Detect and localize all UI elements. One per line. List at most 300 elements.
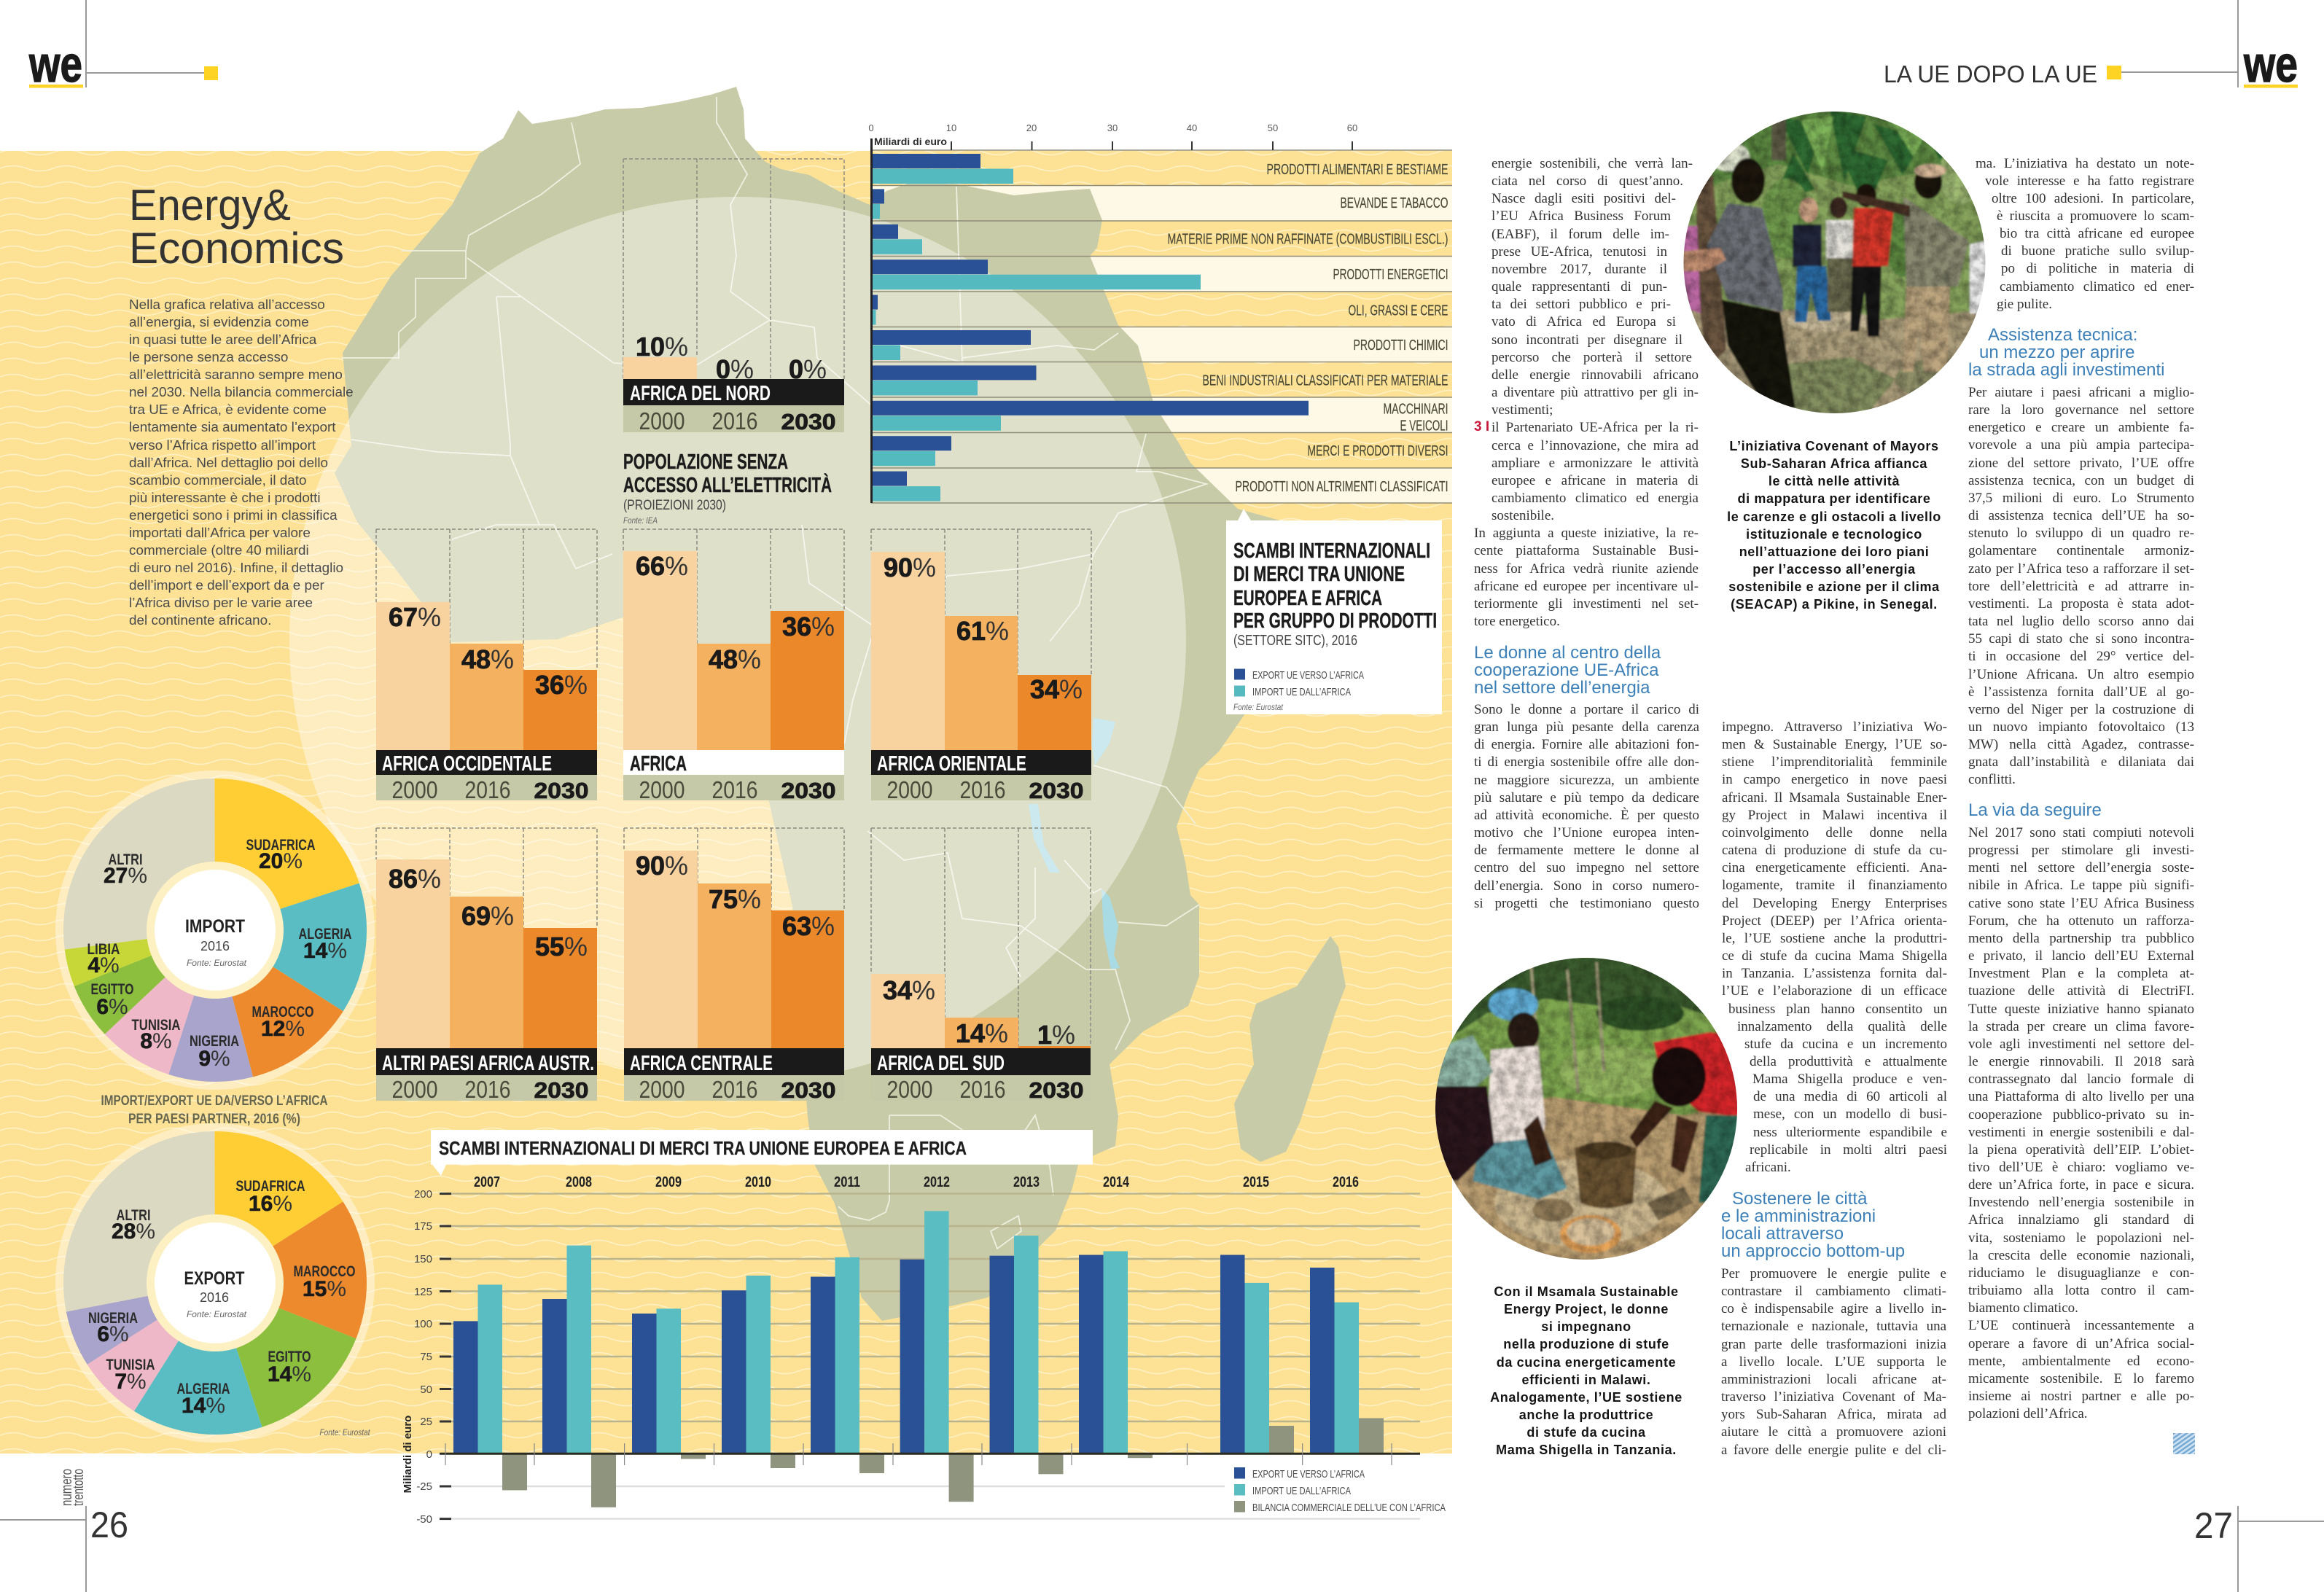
pie chart: export 2016: EXPORT: [184, 1268, 245, 1289]
article column 2: text around photo: catena di produzione di stufe da cu-: [1722, 843, 1947, 858]
header right: section title and logo: [1884, 0, 2298, 93]
bar panel: Altri paesi Africa australe: 2016: [465, 1076, 510, 1103]
horizontal bar chart: trade by product group: PRODOTTI ALIMENTARI E BESTIAME: [1267, 162, 1448, 178]
article column 1: top text: il Partenariato UE-Africa per la ri-: [1492, 420, 1699, 435]
heading: Assistenza tecnica: un mezzo per aprire: [1979, 343, 2134, 362]
pie chart: export 2016: 14%: [182, 1394, 225, 1418]
article column 2: text around photo: mese, con un modello di busi-: [1753, 1107, 1947, 1122]
electricity access circle overlay: [289, 197, 1186, 1083]
bar panel: Africa orientale: 61%: [956, 616, 1009, 646]
horizontal bar chart: trade by product group: BENI INDUSTRIALI CLASSIFICATI PER MATERIALE: [1203, 373, 1448, 389]
article column 2: bottom text: gran parte delle trasformazioni inizia: [1721, 1337, 1946, 1352]
yellow wave background band: [0, 151, 1452, 1454]
bar panel: Africa del Nord: 2030: [781, 409, 835, 434]
article column 2: text around photo: in Tanzania. L’assistenza fornita dal-: [1722, 966, 1947, 981]
pie chart: import 2016: 6%: [96, 995, 128, 1019]
article column 3: Assistenza tecnica text: zione del settore privato, l’UE offre: [1968, 456, 2194, 471]
article column 1: top text: teriormente gli investimenti nel set-: [1474, 596, 1699, 612]
pie chart: export 2016: MAROCCO: [293, 1263, 356, 1280]
article column 2: bottom text: contrastare il cambiamento climati-: [1721, 1284, 1946, 1299]
column chart: EU-Africa trade 2007-2016: 2014: [1103, 1174, 1130, 1190]
article column 3: Assistenza tecnica text: [1968, 385, 2194, 787]
bar panel: Africa centrale: 2000: [639, 1076, 685, 1103]
bar panel: Africa occidentale: 2000: [392, 776, 437, 803]
bar panel: Altri paesi Africa australe: 2030: [534, 1077, 589, 1103]
article column 3: top text: gie pulite.: [1997, 297, 2052, 312]
column chart: EU-Africa trade 2007-2016: 2015: [1243, 1174, 1269, 1190]
article column 3: La via da seguire text: riduciamo le disuguaglianze e con-: [1968, 1265, 2194, 1281]
heading: La via da seguire: La via da seguire: [1968, 800, 2102, 820]
horizontal bar chart: trade by product group: PRODOTTI NON ALTRIMENTI CLASSIFICATI: [1235, 479, 1448, 495]
pie chart: export 2016: 28%: [112, 1220, 155, 1244]
header right: section title and logo: we: [2243, 36, 2298, 93]
horizontal bar chart: trade by product group: OLI, GRASSI E CERE: [1349, 303, 1448, 319]
article column 2: bottom text: Per promuovere le energie pulite e: [1721, 1266, 1946, 1281]
pie chart: import 2016: EGITTO: [90, 981, 134, 998]
column chart: EU-Africa trade 2007-2016: 175: [414, 1220, 432, 1233]
bar panel: Africa: 36%: [782, 612, 835, 641]
footer left: page number and issue: 26: [90, 1505, 128, 1545]
intro text block: l’Africa diviso per le varie aree: [129, 596, 313, 611]
title: [129, 181, 344, 273]
column chart: EU-Africa trade 2007-2016: [402, 1174, 1446, 1526]
horizontal bar chart: trade by product group: 50: [1268, 122, 1278, 133]
pie chart: export 2016: NIGERIA: [88, 1310, 138, 1327]
pie chart: import 2016: 14%: [303, 939, 347, 963]
photo caption: Pikine: di mappatura per identificare: [1737, 491, 1931, 506]
pie chart: export 2016: 7%: [114, 1370, 147, 1394]
article column 3: La via da seguire text: biamento climatico.: [1968, 1300, 2078, 1316]
cream chart row stripes: [871, 185, 1452, 503]
heading: Sostenere le città: [1721, 1189, 1905, 1261]
article column 2: bottom text: yors Sub-Saharan Africa, mirata ad: [1721, 1407, 1946, 1422]
bar panel: Africa del Nord: 2000: [639, 407, 685, 434]
article column 1: top text: delle energie rinnovabili africano: [1492, 367, 1699, 383]
bar panel: Africa: 66%: [636, 551, 688, 581]
column chart: EU-Africa trade 2007-2016: 2007: [474, 1174, 500, 1190]
bar panel: Africa orientale: 2030: [1029, 778, 1083, 803]
pie chart: import 2016: LIBIA: [87, 941, 120, 958]
article column 1: top text: sostenibile.: [1492, 508, 1554, 523]
bar panel: Altri paesi Africa australe: ALTRI PAESI AFRICA AUSTR.: [382, 1052, 594, 1075]
article column 1: top text: novembre 2017, durante il: [1492, 262, 1667, 277]
heading: Le donne: Le donne al centro della: [1474, 643, 1661, 663]
pie chart: export 2016: 6%: [97, 1322, 129, 1346]
article column 3: Assistenza tecnica text: energetico e creare un ambiente fa-: [1968, 420, 2194, 435]
article column 2: text around photo: innalzamento della qualità delle: [1737, 1019, 1947, 1034]
article column 2: text around photo: coinvolgimento delle donne nella: [1722, 825, 1947, 840]
article column 3: Assistenza tecnica text: ti in occasione del 29° vertice del-: [1968, 649, 2194, 664]
horizontal bar chart: trade by product group: BEVANDE E TABACCO: [1340, 195, 1448, 211]
header right: section title and logo: LA UE DOPO LA UE: [1884, 61, 2097, 87]
pie chart: import 2016: Fonte: Eurostat: [187, 958, 247, 968]
intro text block: più interessante è che i prodotti: [129, 491, 321, 506]
bar panel: Africa del Nord: 2016: [711, 407, 758, 434]
chart heading: population without electricity: ACCESSO ALL’ELETTRICITÀ: [623, 472, 832, 497]
hatched end mark: [2173, 1433, 2195, 1454]
article column 2: text around photo: africani. Il Msamala Sustainable Ener-: [1722, 790, 1947, 805]
column chart: EU-Africa trade 2007-2016: EXPORT UE VERSO L’AFRICA: [1252, 1468, 1365, 1480]
bar panel: Africa orientale: AFRICA ORIENTALE: [877, 752, 1026, 776]
photo caption: Pikine: (SEACAP) a Pikine, in Senegal.: [1731, 597, 1938, 612]
callout box: product group chart title and legend: (SETTORE SITC), 2016: [1233, 633, 1357, 649]
heading: Le donne: [1474, 643, 1661, 698]
photo caption: Malawi: anche la produttrice: [1519, 1408, 1653, 1422]
column chart: EU-Africa trade 2007-2016: -50: [416, 1513, 432, 1526]
article column 3: La via da seguire text: vita, sosteniamo le popolazioni nel-: [1968, 1230, 2194, 1246]
article column 1: top text: cambiamento climatico ed energia: [1492, 491, 1699, 506]
pie chart: import 2016: NIGERIA: [190, 1033, 239, 1050]
intro text block: [129, 297, 354, 628]
column chart: EU-Africa trade 2007-2016: 2008: [566, 1174, 592, 1190]
bar panel: Africa occidentale: [376, 529, 597, 803]
article column 3: La via da seguire text: insieme ai nostri partner e alle po-: [1968, 1389, 2194, 1404]
intro text block: dell’import e dell’export da e per: [129, 578, 324, 593]
article column 2: text around photo: in campo energetico in nove paesi: [1722, 772, 1947, 787]
article column 3: Assistenza tecnica text: MW) nella città Agadez, contrasse-: [1968, 737, 2194, 752]
red list number: 3 I: [1474, 419, 1489, 434]
intro text block: del continente africano.: [129, 613, 271, 628]
article column 3: La via da seguire text: Africa innalziamo gli standard di: [1968, 1212, 2194, 1228]
bar panel: Africa del Nord: AFRICA DEL NORD: [630, 382, 771, 405]
photo caption: Malawi: da cucina energeticamente: [1497, 1355, 1676, 1370]
pie chart: export 2016: 15%: [303, 1277, 346, 1301]
article column 2: bottom text: a favore delle energie pulite e del cli-: [1721, 1443, 1946, 1458]
intro text block: tra UE e Africa, è evidente come: [129, 402, 327, 418]
article column 1: top text: tore energetico.: [1474, 614, 1560, 629]
heading: Le donne: cooperazione UE-Africa: [1474, 660, 1658, 680]
pie chart: export 2016: ALTRI: [117, 1207, 150, 1224]
article column 2: text around photo: stiene l’imprenditorialità femminile: [1722, 754, 1947, 770]
bar panel: Africa del Nord: 10%: [636, 332, 688, 362]
bar panel: Africa del Sud: 2000: [886, 1076, 933, 1103]
bar panel: Africa centrale: 90%: [636, 851, 688, 881]
photo caption: Malawi: Analogamente, l’UE sostiene: [1490, 1390, 1682, 1405]
article column 2: text around photo: logamente, tramite il finanziamento: [1722, 878, 1947, 893]
article column 1: top text: prese UE-Africa, tenutosi in: [1492, 244, 1667, 260]
footer right: page number: 27: [2194, 1505, 2233, 1546]
article column 3: Assistenza tecnica text: stenuto lo sviluppo di un quadro re-: [1968, 526, 2194, 541]
article column 3: Assistenza tecnica text: gnata dall’instabilità e dilaniata dai: [1968, 754, 2194, 770]
photo caption: Malawi: di stufe da cucina: [1526, 1425, 1646, 1440]
pie chart: import 2016: 2016: [200, 939, 230, 953]
photo: Covenant of Mayors field visit in Pikine: [1677, 109, 1990, 423]
horizontal bar chart: trade by product group: MACCHINARI: [1384, 401, 1448, 417]
photo caption: Pikine: le carenze e gli ostacoli a livello: [1727, 510, 1941, 524]
bar panel: Africa: 2030: [781, 778, 835, 803]
heading: Sostenere le città: un approccio bottom-up: [1721, 1241, 1905, 1261]
pie charts heading: [101, 1093, 328, 1127]
intro text block: verso l’Africa rispetto all’import: [129, 437, 316, 453]
article column 3: La via da seguire text: nibile in Africa. Le tappe più signifi-: [1968, 878, 2194, 893]
photo caption: Malawi: Mama Shigella in Tanzania.: [1496, 1443, 1677, 1457]
article column 3: La via da seguire text: vestimenti in energie sostenibili e dal-: [1968, 1125, 2194, 1140]
article column 3: Assistenza tecnica text: zato per l’Africa teso a rafforzare il set-: [1968, 561, 2194, 577]
article column 2: text around photo: business plan hanno consentito un: [1728, 1002, 1947, 1016]
photo caption: Pikine: nell’attuazione dei loro piani: [1739, 545, 1929, 559]
article column 1: Le donne text: de fermamente mettere le donne al: [1474, 843, 1699, 858]
intro text block: le persone senza accesso: [129, 350, 288, 365]
horizontal bar chart: trade by product group: 40: [1187, 122, 1197, 133]
column chart: EU-Africa trade 2007-2016: 0: [426, 1448, 432, 1461]
column chart title bar: [431, 1130, 1093, 1176]
column chart title bar: SCAMBI INTERNAZIONALI DI MERCI TRA UNIONE EUROPEA E AFRICA: [439, 1137, 967, 1159]
article column 1: top text: ampliare e armonizzare le attività: [1492, 456, 1699, 471]
bar panel: Africa del Nord: 0%: [716, 354, 754, 384]
horizontal bar chart: trade by product group: 20: [1026, 122, 1037, 133]
article column 3: La via da seguire text: polazioni dell’Africa.: [1968, 1406, 2088, 1421]
bar panel: Africa centrale: 63%: [782, 911, 835, 941]
article column 3: La via da seguire text: dere un’Africa forte, in pace e sicura.: [1968, 1177, 2194, 1193]
photo caption: Malawi: [1490, 1284, 1682, 1457]
article column 2: text around photo: men & Sustainable Energy, l’UE so-: [1722, 737, 1947, 752]
article column 1: top text: sono incontrati per disegnare il: [1492, 332, 1682, 348]
article column 1: top text: percorso che porterà il settore: [1492, 350, 1692, 365]
article column 3: La via da seguire text: vole agli investimenti nel settore del-: [1968, 1037, 2194, 1052]
heading: Assistenza tecnica: la strada agli investimenti: [1968, 360, 2164, 380]
pie chart: import 2016: 8%: [140, 1029, 172, 1053]
article column 3: La via da seguire text: le energie rinnovabili. Il 2018 sarà: [1968, 1054, 2194, 1069]
article column 1: Le donne text: gran lunga più pesante della carenza: [1474, 719, 1699, 735]
callout box: product group chart title and legend: SCAMBI INTERNAZIONALI: [1233, 539, 1430, 563]
column chart: EU-Africa trade 2007-2016: 2009: [655, 1174, 682, 1190]
article column 3: Assistenza tecnica text: tore dell’elettricità e ad attrarre in-: [1968, 579, 2194, 594]
article column 1: top text: cerca e l’innovazione, che mira ad: [1492, 437, 1699, 453]
bar panel: Africa orientale: 2000: [886, 776, 933, 803]
article column 3: top text: oltre 100 adesioni. In particolare,: [1992, 191, 2194, 206]
article column 2: text around photo: del Developing Energy Enterprises: [1722, 896, 1947, 911]
article column 1: Le donne text: motivo che l’Unione europea inten-: [1474, 825, 1699, 840]
heading: Assistenza tecnica: Assistenza tecnica:: [1988, 325, 2137, 345]
pie chart: export 2016: 2016: [200, 1290, 229, 1305]
photo caption: Pikine: istituzionale e tecnologico: [1746, 527, 1922, 542]
column chart: EU-Africa trade 2007-2016: 2012: [924, 1174, 950, 1190]
photo caption: Pikine: [1727, 439, 1941, 612]
pie chart: import 2016: 27%: [104, 864, 147, 888]
pie chart: export 2016: ALGERIA: [176, 1381, 230, 1397]
pie chart: export 2016: 14%: [268, 1362, 311, 1386]
article column 1: Le donne text: ad attività economiche. È per questo: [1474, 808, 1699, 823]
bar panel: Africa del Sud: 2030: [1029, 1077, 1083, 1103]
intro text block: in quasi tutte le aree dell’Africa: [129, 332, 316, 348]
article column 3: La via da seguire text: la piena operatività dell’EIP. L’obiet-: [1968, 1142, 2194, 1158]
article column 2: text around photo: replicabile in molti altri paesi: [1750, 1142, 1947, 1158]
article column 3: La via da seguire text: Nel 2017 sono stati compiuti notevoli: [1968, 825, 2194, 840]
article column 2: bottom text: co è indispensabile agire a livello in-: [1721, 1301, 1946, 1316]
article column 3: Assistenza tecnica text: vestimenti. La proposta è stata adot-: [1968, 596, 2194, 612]
article column 3: La via da seguire text: [1968, 825, 2194, 1421]
article column 3: La via da seguire text: e privato, il lancio dell’EU External: [1968, 948, 2194, 964]
bar panel: Africa del Sud: [871, 828, 1091, 1103]
article column 3: top text: po di politiche in materia di: [2001, 261, 2194, 276]
map of Africa: [335, 87, 1349, 1321]
article column 3: Assistenza tecnica text: golamentare continentale armoniz-: [1968, 543, 2194, 558]
horizontal bar chart: trade by product group: PRODOTTI CHIMICI: [1353, 337, 1448, 354]
callout box: product group chart title and legend: [1226, 509, 1442, 714]
article column 3: La via da seguire text: mente, ambientalmente ed econo-: [1968, 1354, 2194, 1369]
footer left: page number and issue: numero: [59, 1469, 75, 1506]
bar panel: Africa centrale: 2016: [711, 1076, 758, 1103]
photo caption: Malawi: efficienti in Malawi.: [1521, 1373, 1651, 1387]
bar panel: Altri paesi Africa australe: 55%: [535, 932, 588, 961]
bar panel: Africa orientale: 90%: [884, 553, 936, 582]
article column 3: La via da seguire text: Forum, che ha ottenuto un rafforza-: [1968, 913, 2194, 929]
pie chart: export 2016: EGITTO: [268, 1349, 311, 1365]
bar panel: Africa: AFRICA: [630, 752, 687, 776]
article column 3: La via da seguire text: Tutte queste iniziative hanno spianato: [1968, 1002, 2194, 1017]
chart heading: population without electricity: (PROIEZIONI 2030): [623, 498, 726, 513]
callout box: product group chart title and legend: EXPORT UE VERSO L’AFRICA: [1252, 669, 1364, 682]
intro text block: nel 2030. Nella bilancia commerciale: [129, 385, 354, 400]
article column 3: Assistenza tecnica text: verno del Niger per la costruzione di: [1968, 702, 2194, 717]
pie chart: export 2016: 16%: [249, 1192, 292, 1216]
pie charts heading: IMPORT/EXPORT UE DA/VERSO L’AFRICA: [101, 1093, 328, 1109]
article column 1: Le donne text: di energia. Fornire alle abitazioni fon-: [1474, 737, 1699, 752]
article column 3: La via da seguire text: Investendo nell’energia sostenibile in: [1968, 1195, 2194, 1210]
column chart: EU-Africa trade 2007-2016: 200: [414, 1188, 432, 1201]
chart heading: population without electricity: POPOLAZIONE SENZA: [623, 450, 788, 474]
intro text block: di euro nel 2016). Infine, il dettaglio: [129, 561, 343, 576]
bar panel: Africa centrale: 75%: [709, 884, 761, 914]
photo caption: Pikine: le città nelle attività: [1769, 474, 1900, 488]
pie chart: import 2016: 12%: [261, 1017, 305, 1041]
article column 2: text around photo: cina energeticamente efficienti. Ana-: [1722, 860, 1947, 875]
bar panel: Africa: 2000: [639, 776, 685, 803]
photo caption: Malawi: Energy Project, le donne: [1504, 1302, 1669, 1316]
article column 3: La via da seguire text: la crescita delle economie nazionali,: [1968, 1248, 2194, 1263]
article column 1: Le donne text: si progetti che testimoniano questo: [1474, 896, 1699, 911]
header left: logo and rule: [28, 0, 218, 93]
article column 1: top text: africane ed europee per incentivare ul-: [1474, 579, 1699, 594]
article column 2: text around photo: le, l’UE sostiene anche la produttri-: [1722, 931, 1947, 946]
column chart: EU-Africa trade 2007-2016: 50: [420, 1384, 432, 1396]
horizontal bar chart: trade by product group: Miliardi di euro: [874, 136, 947, 147]
column chart: EU-Africa trade 2007-2016: 2011: [834, 1174, 860, 1190]
bar panel: Altri paesi Africa australe: [376, 828, 597, 1103]
article column 2: bottom text: ternazionale e nazionale, tuttavia una: [1721, 1319, 1946, 1334]
article column 1: Le donne text: più salutare e più tempo da dedicare: [1474, 790, 1699, 805]
article column 3: Assistenza tecnica text: l’Unione Africana. Un altro esempio: [1968, 666, 2194, 682]
source note for pies: Fonte: Eurostat: [319, 1427, 370, 1437]
article column 2: text around photo: l’UE e l’elaborazione di un efficace: [1722, 983, 1947, 999]
article column 3: Assistenza tecnica text: di assistenza tecnica dell’UE ha so-: [1968, 508, 2194, 523]
bar panel: Africa orientale: 34%: [1030, 674, 1083, 704]
article column 1: Le donne text: ne maggiore sicurezza, un ambiente: [1474, 773, 1699, 788]
article column 1: top text: ta dei settori pubblico e pri-: [1492, 297, 1671, 312]
horizontal bar chart: trade by product group: 0: [868, 122, 874, 133]
article column 1: top text: (EABF), il forum delle im-: [1492, 227, 1669, 242]
bar panel: Africa occidentale: 36%: [535, 670, 588, 700]
article column 3: La via da seguire text: la strada per creare un clima favore-: [1968, 1019, 2194, 1034]
bar panel: Altri paesi Africa australe: 2000: [392, 1076, 437, 1103]
article column 3: Assistenza tecnica text: è l’assistenza fornita dall’UE al go-: [1968, 684, 2194, 700]
article column 3: top text: bio tra città africane ed europee: [2000, 226, 2194, 241]
horizontal bar chart: trade by product group: 30: [1107, 122, 1118, 133]
bar panel: Africa centrale: 2030: [781, 1077, 835, 1103]
article column 1: top text: europee e africane in materia di: [1492, 473, 1699, 488]
article column 1: top text: quale rappresentanti di pun-: [1492, 279, 1667, 294]
footer left: page number and issue: [0, 1469, 128, 1592]
bar panel: Africa del Sud: AFRICA DEL SUD: [877, 1052, 1005, 1075]
horizontal bar chart: trade by product group: MATERIE PRIME NON RAFFINATE (COMBUSTIBILI ESCL.): [1168, 232, 1448, 248]
horizontal bar chart: trade by product group: 60: [1347, 122, 1357, 133]
intro text block: Nella grafica relativa all’accesso: [129, 297, 325, 313]
article column 1: top text: In aggiunta a queste iniziative, la re-: [1474, 526, 1699, 541]
chart heading: population without electricity: Fonte: IEA: [623, 515, 658, 526]
article column 3: La via da seguire text: tuazione delle attività di ElectriFI.: [1968, 983, 2194, 999]
intro text block: scambio commerciale, il dato: [129, 473, 307, 488]
bar panel: Africa del Nord: 0%: [789, 354, 827, 384]
bar panel: Altri paesi Africa australe: 86%: [389, 864, 441, 894]
callout box: product group chart title and legend: Fonte: Eurostat: [1233, 702, 1284, 712]
column chart: EU-Africa trade 2007-2016: IMPORT UE DALL’AFRICA: [1252, 1485, 1351, 1497]
article column 2: text around photo: gy Project in Malawi incentiva il: [1722, 808, 1947, 823]
pie charts heading: PER PAESI PARTNER, 2016 (%): [128, 1112, 300, 1127]
heading: Sostenere le città: e le amministrazioni: [1721, 1206, 1876, 1226]
article column 3: La via da seguire text: cative sono state l’EU Africa Business: [1968, 896, 2194, 911]
article column 2: text around photo: ce di stufe da cucina Mama Shigella: [1722, 948, 1947, 964]
heading: Sostenere le città: locali attraverso: [1721, 1224, 1844, 1244]
pie chart: export 2016: [55, 1123, 375, 1443]
bar panel: Africa del Sud: 34%: [883, 975, 935, 1005]
photo caption: Pikine: Sub-Saharan Africa affianca: [1741, 456, 1927, 471]
bar panel: Africa occidentale: 2016: [465, 776, 510, 803]
article column 1: top text: Nasce dagli esiti positivi del-: [1492, 191, 1676, 206]
article column 2: text around photo: stufe da cucina e un incremento: [1744, 1037, 1947, 1052]
article column 1: top text: energie sostenibili, che verrà lan-: [1492, 156, 1693, 171]
intro text block: importati dall’Africa per valore: [129, 526, 311, 541]
article column 3: La via da seguire text: tivo dell’UE è chiaro: vogliamo ve-: [1968, 1160, 2194, 1175]
photo caption: Malawi: si impegnano: [1541, 1319, 1631, 1334]
callout box: product group chart title and legend: DI MERCI TRA UNIONE: [1233, 563, 1405, 586]
article column 2: text around photo: Mama Shigella produce e ven-: [1752, 1072, 1947, 1087]
footer left: page number and issue: trentotto: [71, 1469, 87, 1506]
pie chart: export 2016: TUNISIA: [106, 1357, 155, 1373]
article column 2: text around photo: africani.: [1745, 1160, 1791, 1175]
column chart: EU-Africa trade 2007-2016: Miliardi di euro: [402, 1416, 414, 1493]
article column 2: bottom text: aiutare le città a promuovere azioni: [1721, 1424, 1946, 1440]
pie chart: import 2016: TUNISIA: [131, 1017, 181, 1034]
article column 1: Le donne text: ti di energia sostenibile offre alle don-: [1474, 754, 1699, 770]
column chart: EU-Africa trade 2007-2016: 125: [414, 1286, 432, 1298]
article column 2: bottom text: a livello locale. L’UE supporta le: [1721, 1354, 1946, 1370]
article column 3: La via da seguire text: contrassegnato dal lancio formale di: [1968, 1072, 2194, 1087]
column chart: EU-Africa trade 2007-2016: 25: [420, 1416, 432, 1428]
pie chart: import 2016: IMPORT: [185, 916, 245, 937]
bar panel: Altri paesi Africa australe: 69%: [461, 901, 514, 931]
article column 1: Le donne text: centro del suo impegno nel settore: [1474, 860, 1699, 875]
intro text block: all’elettricità saranno sempre meno: [129, 367, 343, 383]
photo caption: Pikine: sostenibile e azione per il clima: [1728, 580, 1940, 594]
bar panel: Africa orientale: [871, 529, 1091, 803]
article column 3: La via da seguire text: operare a favore di un’Africa social-: [1968, 1336, 2194, 1351]
column chart: EU-Africa trade 2007-2016: 2013: [1013, 1174, 1040, 1190]
bar panel: Africa centrale: AFRICA CENTRALE: [630, 1052, 773, 1075]
pie chart: import 2016: MAROCCO: [252, 1004, 313, 1021]
bar panel: Africa: 2016: [711, 776, 758, 803]
article column 1: top text: vato di Africa ed Europa si: [1492, 314, 1676, 329]
article column 3: Assistenza tecnica text: 55 capi di stato che si sono incontra-: [1968, 631, 2194, 647]
article column 2: bottom text: [1721, 1266, 1946, 1458]
pie chart: import 2016: ALTRI: [108, 851, 143, 868]
article column 2: bottom text: amministrazioni locali africane at-: [1721, 1372, 1946, 1387]
pie chart: import 2016: SUDAFRICA: [246, 837, 315, 854]
article column 1: top text: cente piattaforma Sustainable Busi-: [1474, 543, 1699, 558]
article column 1: top text: a diventare più attrattivo per gli in-: [1492, 385, 1699, 400]
column chart: EU-Africa trade 2007-2016: BILANCIA COMMERCIALE DELL’UE CON L’AFRICA: [1252, 1502, 1446, 1514]
article column 2: bottom text: traverso l’iniziativa Covenant of Ma-: [1721, 1389, 1946, 1405]
article column 3: Assistenza tecnica text: tata nel luglio dello scorso anno dai: [1968, 614, 2194, 629]
